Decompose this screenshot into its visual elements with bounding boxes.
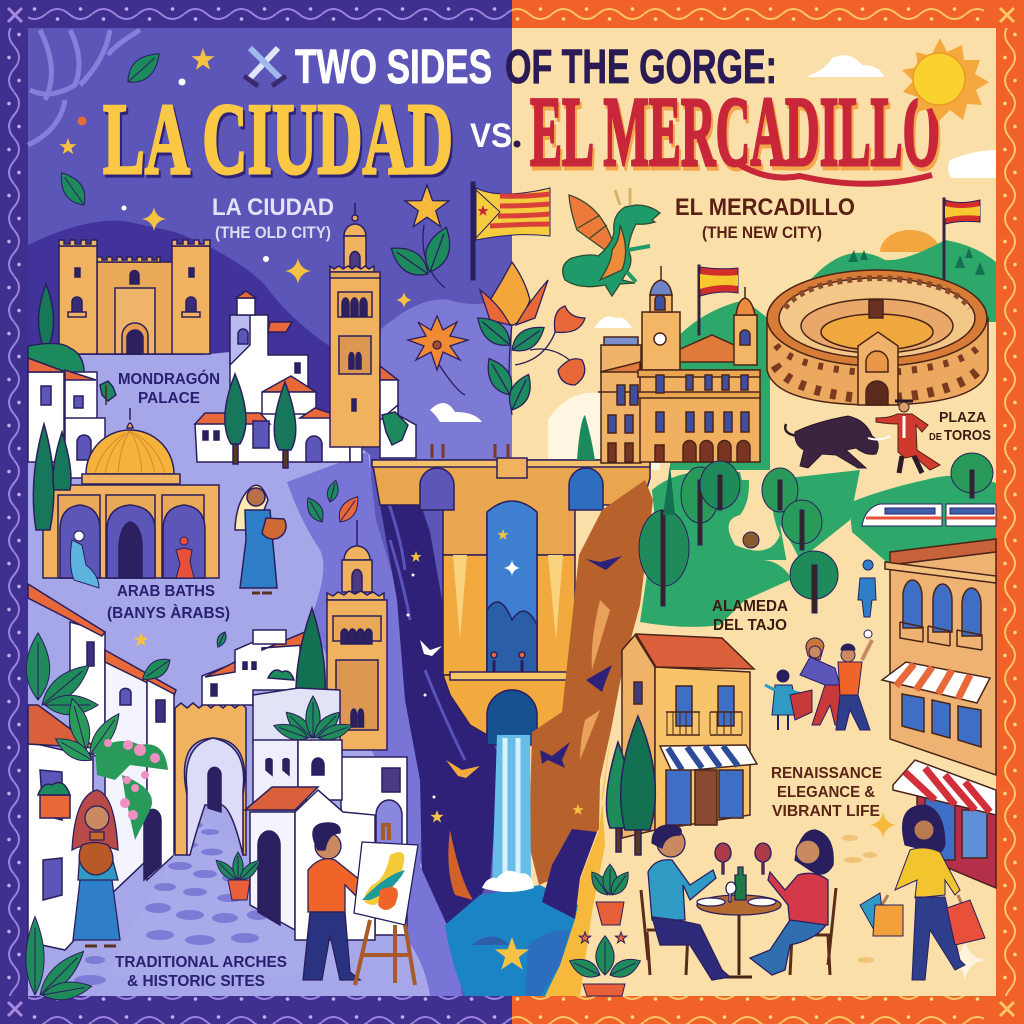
woman with pot — [235, 485, 286, 593]
horseshoe arch gate — [175, 703, 246, 855]
matador — [876, 401, 940, 473]
label: Renaissance elegance and vibrant life: VIBRANT LIFE — [772, 803, 880, 820]
woman — [750, 830, 836, 975]
heading: La Ciudad — [103, 83, 455, 199]
palms, bottom left corner — [26, 917, 93, 1003]
upper white houses behind the gate — [202, 630, 305, 705]
label: Renaissance elegance and vibrant life: ELEGANCE & — [777, 784, 875, 801]
white block houses, lower centre — [245, 688, 407, 940]
potted plants, right — [566, 864, 644, 996]
lower left village: white houses — [28, 584, 176, 950]
central plant and star flower — [385, 185, 585, 415]
text: El Mercadillo subtitle: (THE NEW CITY) — [702, 223, 822, 242]
family group — [765, 560, 876, 730]
label: Mondragón Palace: MONDRAGÓN — [118, 369, 220, 388]
dragon — [563, 188, 660, 296]
river pool — [445, 871, 578, 996]
small icons on lower-left ground — [133, 630, 229, 686]
text: La Ciudad subtitle — [212, 194, 334, 242]
label: Arab Baths: (BANYS ÀRABS) — [107, 603, 230, 622]
park: Alameda del Tajo — [639, 453, 996, 638]
bougainvillea flowers — [95, 739, 168, 840]
white hillside houses, left — [28, 343, 116, 478]
cypresses by the yellow house — [606, 716, 655, 855]
Spanish flag on bullring — [943, 198, 980, 280]
text: La Ciudad subtitle: LA CIUDAD — [212, 194, 334, 221]
label: Traditional arches and historic sites — [115, 954, 287, 990]
floating leaves — [302, 479, 364, 526]
cafe scene: couple at table — [641, 825, 836, 980]
panel: left sky background — [28, 28, 512, 996]
cobbled alley — [74, 805, 345, 985]
sun — [902, 38, 989, 122]
palms and leaves lower left — [26, 633, 125, 767]
cypress and minaret, lower — [296, 520, 387, 750]
cypresses, centre — [225, 374, 296, 468]
waterfall — [492, 735, 531, 885]
yellow house with blue awning — [622, 634, 757, 838]
shopper woman — [860, 805, 985, 980]
Puente Nuevo bridge — [372, 444, 650, 745]
small trees on hills — [848, 248, 985, 275]
text: El Mercadillo subtitle: EL MERCADILLO — [675, 194, 855, 221]
catalan flag — [471, 182, 550, 280]
potted plant in alley — [213, 852, 263, 900]
heading: La Ciudad: LA CIUDAD — [103, 83, 453, 196]
title: two sides of the gorge: TWO SIDES — [295, 41, 492, 94]
right building with arches and striped awning — [882, 539, 996, 775]
label: Alameda del Tajo: DEL TAJO — [713, 617, 787, 634]
gorge: dark left rock — [372, 460, 500, 925]
train — [862, 504, 996, 526]
panel: right warm background — [512, 28, 996, 996]
sparkle and path stones — [842, 812, 985, 980]
agave above white block — [272, 696, 354, 744]
gorge: brown right cliff — [529, 480, 653, 996]
title: two sides of the gorge — [244, 41, 777, 94]
label: Plaza de Toros — [929, 409, 991, 444]
cypress beside palace — [38, 284, 54, 348]
label: Plaza de Toros: TOROS — [944, 427, 991, 444]
label: Renaissance elegance and vibrant life — [771, 765, 882, 820]
man — [641, 825, 731, 980]
palace: Mondragón — [59, 240, 210, 354]
table — [697, 867, 781, 977]
label: Plaza de Toros: DE — [929, 432, 942, 443]
dark rock silhouette — [542, 829, 597, 919]
bull — [785, 416, 890, 468]
label: Alameda del Tajo: ALAMEDA — [712, 598, 788, 615]
woman with terracotta pot, lower left — [72, 790, 120, 946]
white hillside houses, centre — [195, 291, 362, 462]
heading: La Ciudad: LA CIUDAD — [105, 86, 455, 199]
label: Alameda del Tajo — [712, 598, 788, 634]
minaret tower, upper — [330, 203, 416, 458]
label: Arab Baths — [107, 583, 230, 622]
label: Mondragón Palace: PALACE — [138, 390, 200, 407]
bullring — [767, 270, 988, 405]
town hall — [577, 266, 760, 463]
label: Mondragón Palace — [118, 369, 220, 407]
Spanish flag on town hall — [698, 265, 738, 335]
text: El Mercadillo subtitle — [675, 194, 855, 242]
decorative sky items, left — [54, 47, 412, 308]
label: Traditional arches and historic sites: TRADITIONAL ARCHES — [115, 954, 287, 971]
label: Arab Baths: ARAB BATHS — [117, 583, 215, 600]
label: Traditional arches and historic sites: & HISTORIC SITES — [127, 973, 265, 990]
cypresses, left of baths — [33, 424, 71, 530]
label: Renaissance elegance and vibrant life: RENAISSANCE — [771, 765, 882, 782]
domed Arab baths — [43, 408, 219, 578]
heading: vs: VS — [470, 117, 512, 155]
painter and easel — [303, 823, 418, 985]
label: Plaza de Toros: PLAZA — [939, 409, 986, 426]
striped shop, bottom right — [893, 760, 996, 888]
icon: crossed swords — [244, 48, 286, 86]
text: La Ciudad subtitle: (THE OLD CITY) — [215, 223, 331, 242]
title: two sides of the gorge: OF THE GORGE: — [505, 41, 777, 94]
figures in the baths — [70, 531, 194, 588]
